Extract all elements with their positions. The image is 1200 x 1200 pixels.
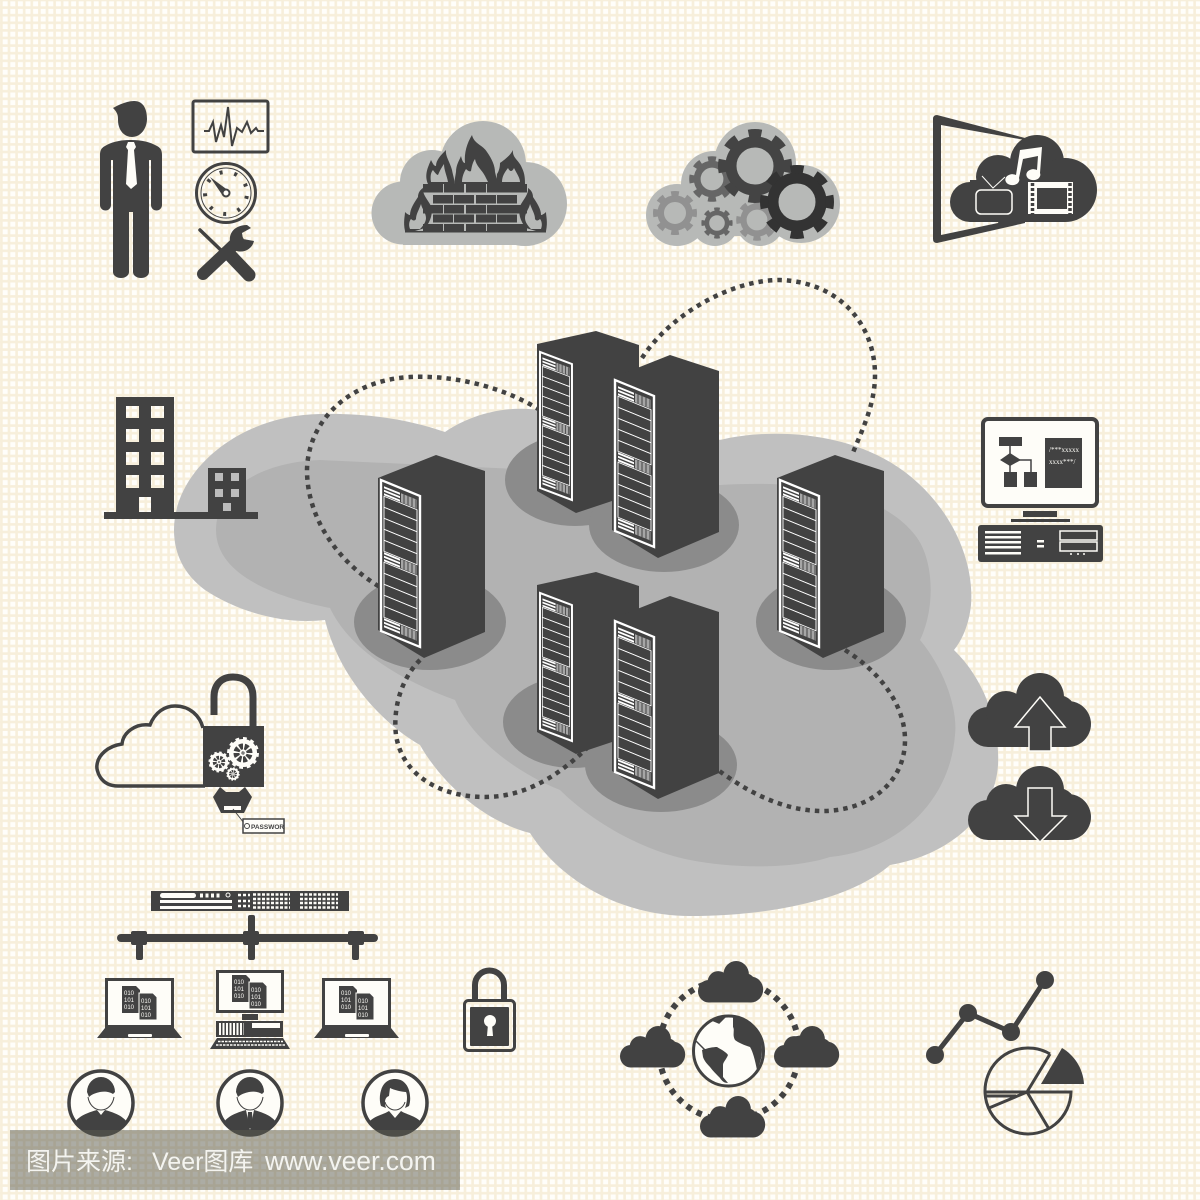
icon: cloud with open lock and password key	[97, 677, 284, 833]
server rack: bottom front	[612, 596, 719, 799]
icon: programming computer: xxxx***/	[1049, 458, 1076, 466]
server rack: bottom rear	[537, 572, 639, 754]
film strip	[1028, 182, 1073, 214]
dotted network links	[307, 280, 905, 811]
icon: monitor with waveform	[193, 101, 268, 152]
icon: cloud download	[968, 766, 1091, 842]
icon: line chart	[926, 971, 1054, 1064]
server rack: left	[378, 455, 485, 658]
cloud: right	[774, 1026, 839, 1067]
icon: global cloud network	[620, 961, 839, 1137]
server rack: top rear	[537, 331, 639, 513]
tv	[976, 176, 1012, 214]
flames	[404, 135, 547, 231]
icon: media cloud on screen	[933, 115, 1097, 243]
icon: firewall cloud	[372, 121, 567, 246]
icon: left laptop	[97, 980, 182, 1038]
icon: programming computer: /***xxxxx	[1049, 446, 1079, 454]
globe	[694, 1016, 764, 1086]
cloud: bottom	[700, 1096, 765, 1137]
brick wall	[423, 184, 527, 232]
avatar: man in suit	[218, 1071, 282, 1135]
large outer cloud	[174, 409, 998, 916]
icon: cloud with open lock and password key: PASSWOR	[251, 824, 284, 831]
cloud: left	[620, 1026, 685, 1067]
server shadows	[354, 434, 906, 812]
icon: cloud upload	[968, 673, 1091, 751]
avatar: woman	[363, 1071, 427, 1135]
music note	[1005, 147, 1042, 185]
watermark bar: www.veer.com	[264, 1146, 436, 1176]
server rack: top front	[612, 355, 719, 558]
server rack: right	[777, 455, 884, 658]
network bus connectors	[117, 915, 378, 960]
watermark bar: 图片来源:	[26, 1148, 133, 1176]
icon: programming computer	[978, 419, 1103, 562]
cloud: top	[698, 961, 763, 1002]
icon: IT administrator	[100, 101, 162, 278]
watermark bar	[10, 1130, 460, 1190]
icon: padlock	[464, 971, 514, 1050]
icon: office buildings	[104, 397, 258, 519]
icon: pie chart	[984, 1048, 1084, 1134]
watermark bar: Veer图库	[152, 1148, 253, 1176]
central cloud data center	[174, 280, 998, 916]
avatar: man in collar	[69, 1071, 133, 1135]
icon: wrench and screwdriver	[200, 225, 254, 275]
icon: gears cloud	[646, 122, 840, 246]
icon: speed gauge	[196, 164, 256, 222]
icon: right laptop	[314, 980, 399, 1038]
network server rack unit	[151, 891, 349, 911]
icon: desktop computer	[210, 972, 290, 1049]
inner cloud layer	[216, 460, 955, 866]
